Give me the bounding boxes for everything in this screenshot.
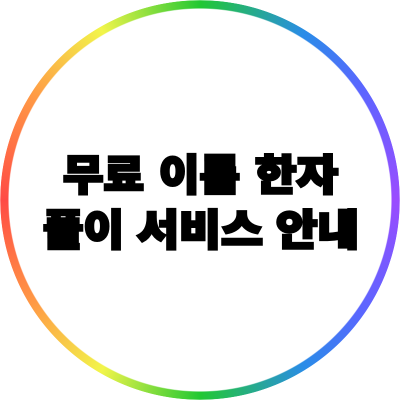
title: 무료 <box>63 152 144 199</box>
title: 한자 <box>255 152 338 199</box>
title: 안내 <box>276 207 359 254</box>
title: 서비스 <box>137 207 263 254</box>
title: 이름 <box>159 152 240 199</box>
title: 풀이 <box>43 207 124 254</box>
